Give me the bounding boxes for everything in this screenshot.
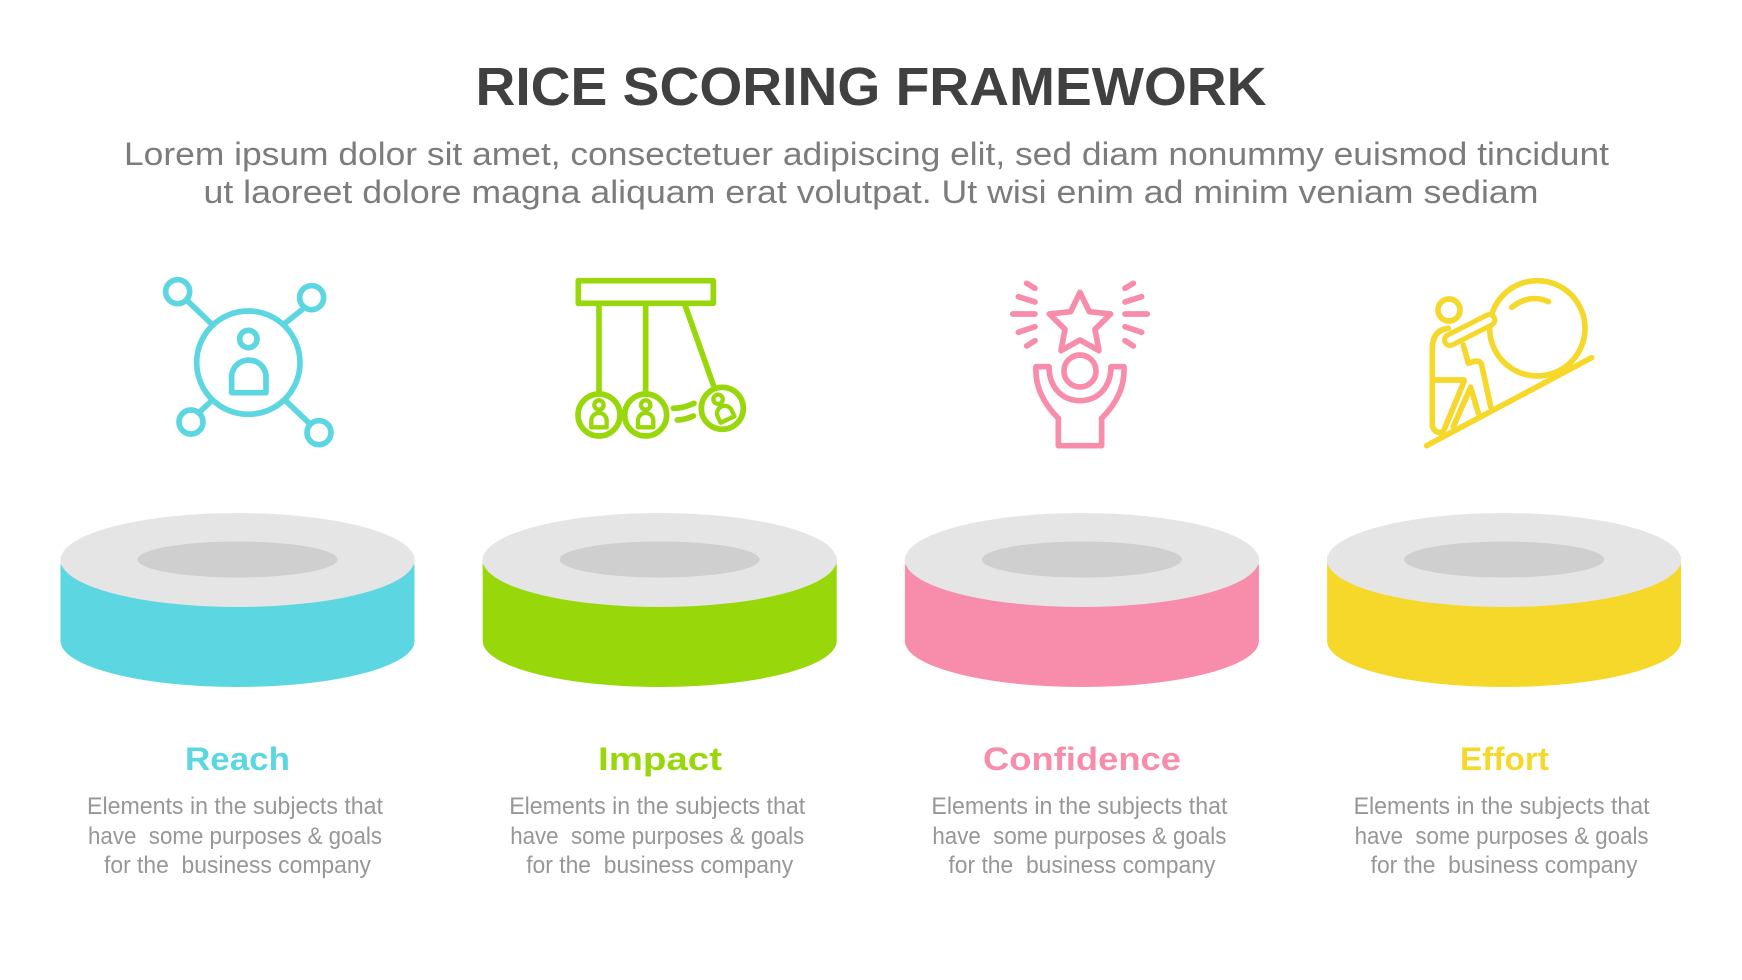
- label: confidence: have some purposes & goals: [932, 823, 1226, 850]
- label: reach: for the business company: [104, 852, 371, 879]
- label: effort: Elements in the subjects that: [1354, 793, 1650, 820]
- icon: effort boulder: [1427, 281, 1592, 446]
- disc: effort: [1327, 513, 1681, 687]
- label: confidence: Confidence: [983, 741, 1181, 777]
- label: confidence: Elements in the subjects that: [931, 793, 1228, 820]
- label: effort: have some purposes & goals: [1355, 823, 1649, 850]
- label: reach: Reach: [185, 741, 290, 777]
- label: impact: [509, 741, 806, 879]
- disc: confidence: [905, 513, 1259, 687]
- label: impact: Elements in the subjects that: [509, 793, 806, 820]
- subtitle: Lorem ipsum dolor sit amet, consectetuer adipiscing elit, sed diam nonummy euismod tincidunt: [124, 136, 1609, 172]
- label: confidence: for the business company: [948, 852, 1215, 879]
- label: impact: Impact: [598, 741, 722, 777]
- label: reach: [87, 741, 383, 879]
- subtitle: ut laoreet dolore magna aliquam erat volutpat. Ut wisi enim ad minim veniam sediam: [204, 174, 1538, 210]
- label: reach: have some purposes & goals: [88, 823, 382, 850]
- subtitle: [124, 136, 1609, 210]
- label: confidence: [931, 741, 1228, 879]
- label: impact: for the business company: [526, 852, 793, 879]
- label: effort: [1354, 741, 1650, 879]
- label: effort: for the business company: [1371, 852, 1638, 879]
- disc: impact: [483, 513, 837, 687]
- label: reach: Elements in the subjects that: [87, 793, 383, 820]
- icon: confidence star person: [1013, 283, 1147, 446]
- title: RICE SCORING FRAMEWORK: [476, 57, 1267, 117]
- label: impact: have some purposes & goals: [510, 823, 804, 850]
- icon: reach network: [166, 280, 331, 445]
- disc: reach: [60, 513, 414, 687]
- icon: impact pendulum: [578, 281, 743, 436]
- label: effort: Effort: [1460, 741, 1549, 777]
